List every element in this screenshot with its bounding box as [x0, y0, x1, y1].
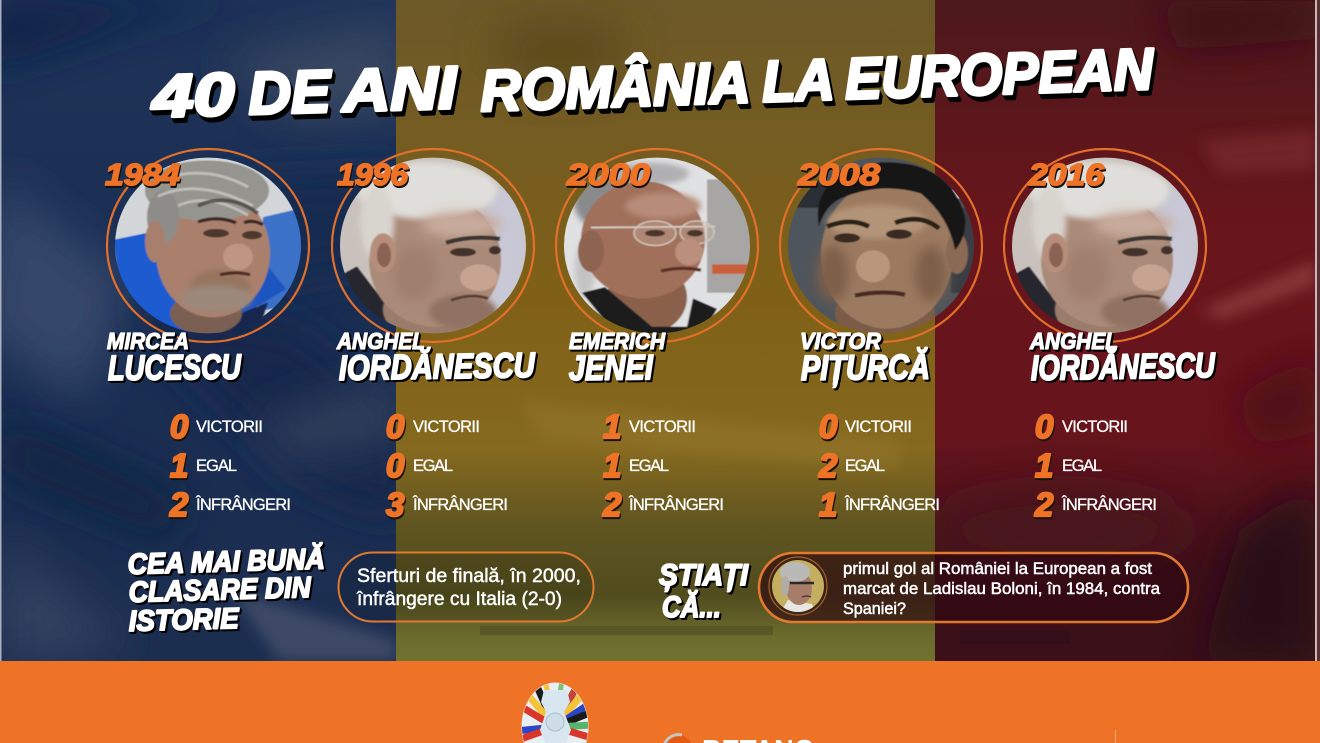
portrait 1984: Mircea Lucescu	[107, 149, 309, 342]
callout: best ranking: Sferturi de finală, în 2000,	[357, 566, 581, 587]
stats 2000	[602, 408, 724, 523]
portrait 2016: Anghel Iordănescu	[1004, 149, 1206, 342]
name: Emerich Jenei	[569, 328, 665, 388]
yellow flag band	[396, 0, 936, 661]
stats 2000: 2	[602, 486, 622, 523]
title part one: 40	[150, 61, 235, 130]
stats 2008: 0	[819, 408, 838, 445]
stats 1984: 2	[169, 486, 189, 523]
name: Anghel Iordănescu 2016: ANGHEL	[1029, 328, 1118, 354]
name: Mircea Lucescu	[107, 328, 242, 388]
heading: best ranking: CLASARE DIN	[128, 572, 312, 609]
stats 2008: ÎNFRÂNGERI	[844, 495, 940, 514]
stats 2008: 2	[818, 447, 838, 484]
title part one: ANI	[339, 54, 459, 124]
callout: did you know: marcat de Ladislau Boloni, în 1984, contra	[843, 580, 1161, 598]
stats 2016: 0	[1035, 408, 1054, 445]
stats 2000: ÎNFRÂNGERI	[628, 495, 724, 514]
name: Anghel Iordănescu: ANGHEL	[336, 328, 425, 354]
stats 2008: VICTORII	[845, 418, 912, 436]
title part two: EUROPEAN	[844, 37, 1155, 112]
stats 2008	[818, 408, 940, 523]
coach names	[107, 328, 1216, 388]
stats 2000: VICTORII	[629, 418, 696, 436]
year 1984: 1984	[105, 157, 180, 192]
name: Anghel Iordănescu 2016	[1029, 328, 1216, 388]
callout: best ranking	[338, 552, 594, 622]
callout: did you know: Spaniei?	[843, 600, 906, 618]
name: Anghel Iordănescu	[336, 328, 536, 388]
stats 2000: EGAL	[629, 457, 669, 475]
portrait 2008: Victor Pițurcă	[780, 149, 982, 342]
stats 2016: 2	[1034, 486, 1054, 523]
stats 1984: 1	[170, 447, 188, 484]
heading: did you know	[659, 559, 749, 624]
heading: did you know: CĂ...	[662, 590, 721, 624]
stats 1996: EGAL	[413, 457, 453, 475]
title part two	[479, 37, 1155, 124]
year 1996: 1996	[337, 157, 409, 192]
stats 1996: VICTORII	[413, 418, 480, 436]
name: Mircea Lucescu: MIRCEA	[107, 328, 189, 354]
title part one: DE	[247, 58, 333, 127]
year labels	[105, 157, 1105, 192]
footer band	[0, 661, 1320, 743]
title	[150, 37, 1155, 130]
name: Victor Pițurcă	[800, 328, 930, 388]
icon: Ladislau Boloni portrait	[769, 557, 827, 615]
red flag band	[930, 0, 1316, 661]
callout: best ranking: înfrângere cu Italia (2-0)	[356, 589, 562, 610]
stats 1996: 0	[386, 408, 405, 445]
blue flag band	[0, 0, 400, 661]
portrait 2000: Emerich Jenei	[556, 149, 758, 342]
stats 2008: EGAL	[845, 457, 885, 475]
stats 2016	[1034, 408, 1157, 523]
year 2016: 2016	[1028, 157, 1105, 192]
stats 1996: 3	[386, 486, 404, 523]
portrait 1996: Anghel Iordănescu	[332, 149, 534, 342]
year 2000: 2000	[566, 157, 650, 192]
name: Victor Pițurcă: VICTOR	[800, 328, 881, 354]
stats 2016: ÎNFRÂNGERI	[1061, 495, 1157, 514]
name: Victor Pițurcă: PIȚURCĂ	[801, 347, 930, 388]
stats 2000: 1	[603, 447, 621, 484]
stats 1984: EGAL	[196, 457, 237, 475]
icon: Euro 2024 trophy logo	[522, 682, 588, 743]
stats 1996: ÎNFRÂNGERI	[412, 495, 508, 514]
title part two: ROMÂNIA	[479, 50, 751, 124]
name: Emerich Jenei: JENEI	[569, 348, 654, 388]
logo: Betano	[663, 735, 815, 743]
stats 1984	[169, 408, 291, 523]
name: Anghel Iordănescu 2016: IORDĂNESCU	[1030, 345, 1216, 388]
stats 1996	[386, 408, 508, 523]
callout: did you know	[759, 553, 1188, 622]
stats 2016: EGAL	[1062, 457, 1102, 475]
name: Mircea Lucescu: LUCESCU	[108, 348, 242, 388]
stats 2000: 1	[603, 408, 621, 445]
heading: did you know: ȘTIAȚI	[659, 559, 749, 592]
title part one	[150, 54, 459, 130]
stats 1996: 0	[386, 447, 405, 484]
stats 1984: VICTORII	[196, 418, 263, 436]
heading: best ranking	[127, 542, 325, 638]
stats 1984: 0	[170, 408, 189, 445]
stats 2016: VICTORII	[1062, 418, 1128, 436]
title part two: LA	[761, 47, 835, 115]
stats 1984: ÎNFRÂNGERI	[195, 495, 291, 514]
name: Anghel Iordănescu: IORDĂNESCU	[338, 345, 536, 388]
heading: best ranking: ISTORIE	[128, 603, 241, 638]
name: Emerich Jenei: EMERICH	[569, 328, 665, 354]
stats 2016: 1	[1035, 447, 1053, 484]
callout: did you know: primul gol al României la European a fost	[843, 560, 1152, 578]
heading: best ranking: CEA MAI BUNĂ	[127, 542, 325, 581]
stats 2008: 1	[819, 486, 837, 523]
year 2008: 2008	[797, 157, 881, 192]
